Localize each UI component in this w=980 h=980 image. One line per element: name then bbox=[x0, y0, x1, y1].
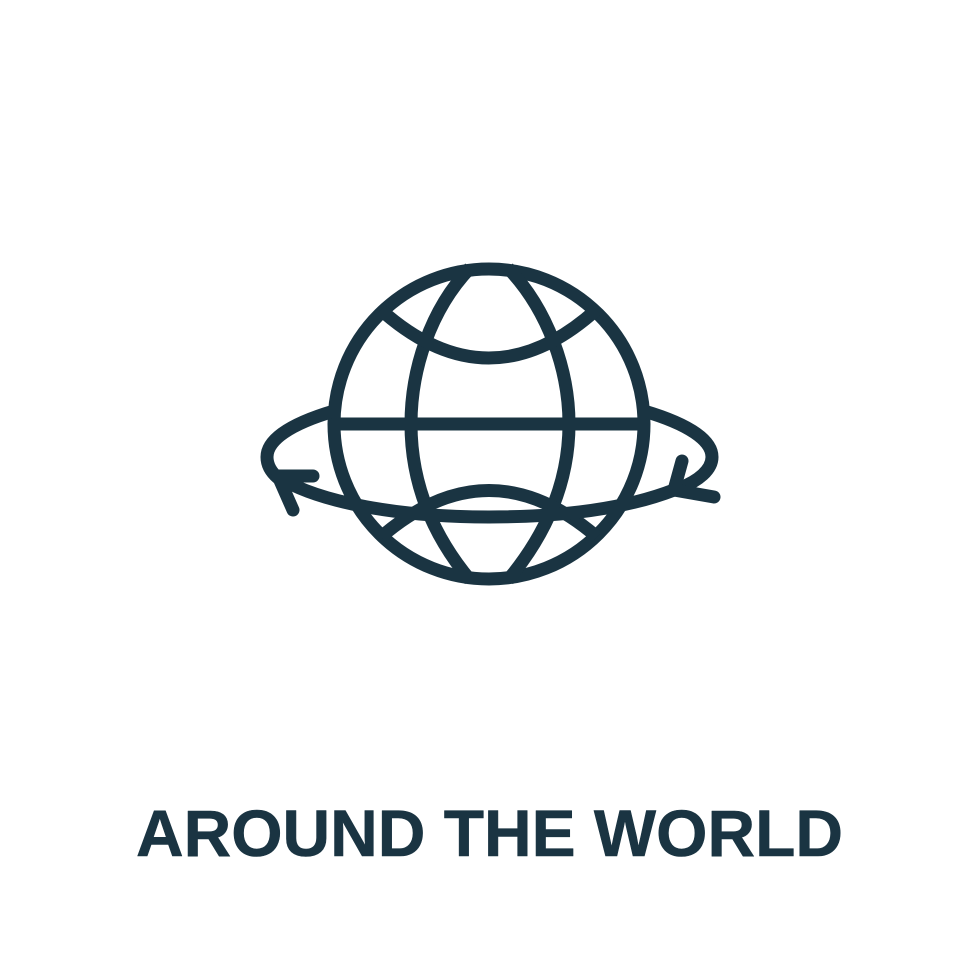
right arrowhead bbox=[674, 461, 714, 497]
globe outline bbox=[334, 269, 644, 579]
orbit left back segment bbox=[267, 411, 334, 478]
meridian left bbox=[411, 268, 470, 580]
orbit right back segment bbox=[644, 411, 712, 488]
lower latitude arc bbox=[381, 490, 597, 537]
left arrowhead bbox=[278, 476, 313, 510]
orbit front segment bbox=[278, 477, 674, 517]
title: AROUND THE WORLD bbox=[136, 796, 843, 870]
meridian right bbox=[508, 268, 569, 580]
upper latitude arc bbox=[381, 310, 596, 358]
icon: globe with orbit arrow bbox=[267, 268, 714, 580]
equator line bbox=[334, 418, 644, 430]
